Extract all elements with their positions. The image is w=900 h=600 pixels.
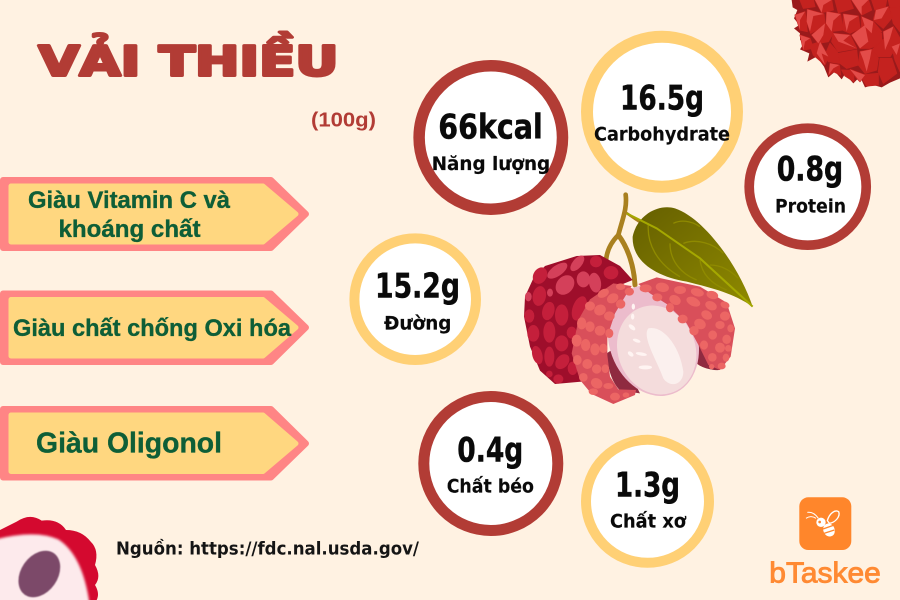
benefit arrow: antioxidants xyxy=(3,294,306,362)
lychee white flesh xyxy=(0,534,91,600)
value: 16.5g: 16.5g xyxy=(620,78,704,118)
stat circle: energy xyxy=(419,66,562,209)
benefit text: minerals: khoáng chất xyxy=(58,216,200,243)
illustration: halved lychee bottom left xyxy=(0,517,98,600)
label: fiber: Chất xơ xyxy=(610,510,687,533)
label: fat: Chất béo xyxy=(447,475,534,498)
leaf xyxy=(627,207,753,307)
lychee stem xyxy=(606,195,642,285)
benefit arrow: oligonol xyxy=(3,409,306,478)
logo: bTaskee xyxy=(769,497,881,590)
stat circle: carbohydrate xyxy=(587,37,737,187)
pink open peel xyxy=(572,277,735,404)
label: carbohydrate: Carbohydrate xyxy=(594,124,730,146)
logo wordmark: bTaskee xyxy=(769,558,881,590)
shadow under peel xyxy=(607,340,720,393)
red lychee skin xyxy=(524,253,633,384)
rambutan highlights xyxy=(795,0,900,82)
label: energy: Năng lượng xyxy=(432,153,550,175)
value: 0.8g: 0.8g xyxy=(777,150,843,190)
rambutan dark base xyxy=(792,0,900,87)
icon: bee xyxy=(806,511,839,538)
label: protein: Protein xyxy=(775,196,846,218)
benefit text: oligonol: Giàu Oligonol xyxy=(36,428,222,460)
value: 0.4g: 0.4g xyxy=(457,431,523,471)
rambutan facets xyxy=(795,0,900,86)
label: sugar: Đường xyxy=(384,312,452,334)
logo icon tile xyxy=(799,497,851,550)
lychee rind xyxy=(0,517,98,600)
serving size note: (100g) xyxy=(311,110,376,132)
illustration: lychee with leaf xyxy=(524,195,753,409)
lychee flesh xyxy=(593,272,714,409)
stat circle: sugar xyxy=(354,238,476,360)
lychee seed xyxy=(18,550,61,598)
benefit arrow: vitamin C xyxy=(3,180,306,248)
benefit text: antioxidants: Giàu chất chống Oxi hóa xyxy=(13,315,291,342)
value: 15.2g: 15.2g xyxy=(375,267,460,307)
stat circle: fiber xyxy=(586,440,709,563)
source citation: Nguồn: https://fdc.nal.usda.gov/ xyxy=(116,538,420,560)
illustration: rambutan top right xyxy=(792,0,900,87)
stat circle: protein xyxy=(749,128,866,245)
stat circle: fat xyxy=(424,396,558,530)
value: 66kcal: 66kcal xyxy=(438,107,543,147)
title: VẢI THIỀU xyxy=(38,32,338,86)
value: 1.3g: 1.3g xyxy=(615,466,680,506)
benefit text: vitamin C: Giàu Vitamin C và xyxy=(28,187,230,214)
